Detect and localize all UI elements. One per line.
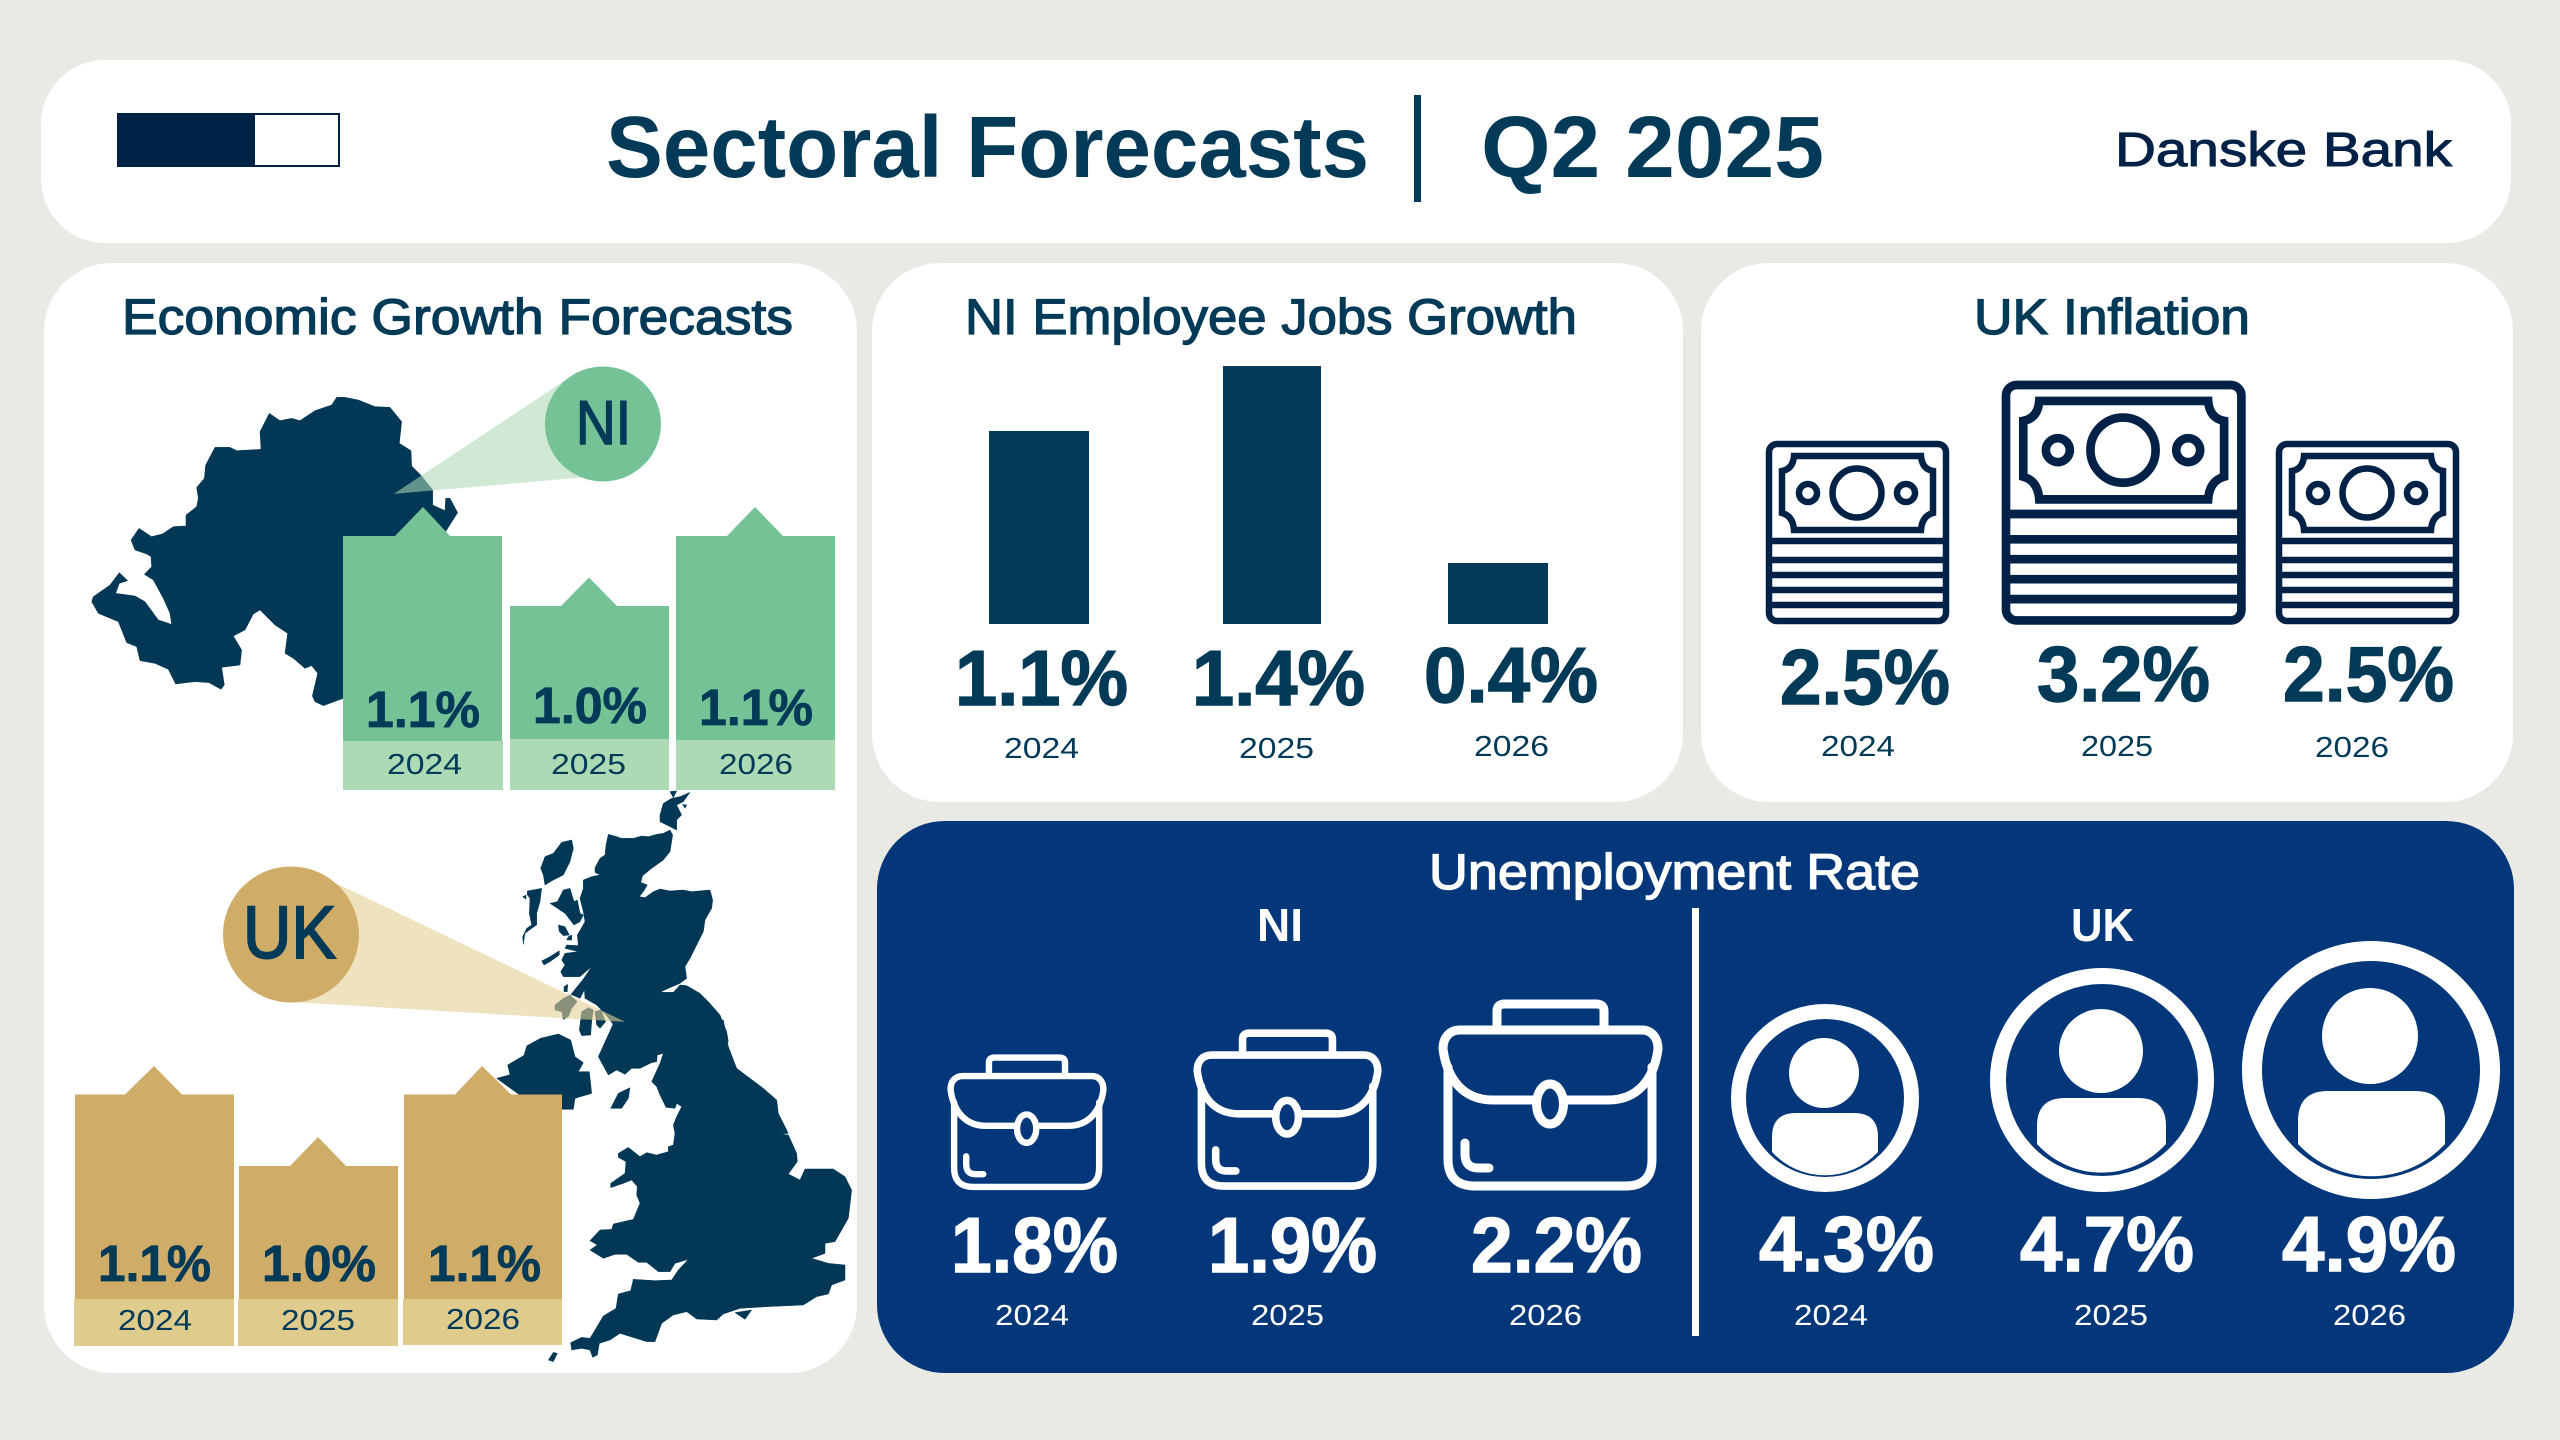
value: UK 2024: 4.3% [1759, 1200, 1934, 1288]
year: inflation 2026: 2026 [2315, 732, 2389, 764]
callout cone: UK [263, 883, 625, 1022]
value: NI 2026: 2.2% [1471, 1201, 1642, 1289]
brand name: Danske Bank [2115, 124, 2453, 177]
bar: UK 2026 [403, 1066, 562, 1345]
value: UK 2025: 4.7% [2020, 1200, 2194, 1288]
bar: NI 2024 [343, 507, 503, 790]
heading: unemployment rate: Unemployment Rate [1429, 844, 1920, 900]
bar: jobs 2025: 1.4% [1192, 634, 1365, 722]
callout cone: NI [394, 380, 631, 494]
value: inflation 2025: 3.2% [2037, 630, 2210, 718]
year: inflation 2025: 2025 [2081, 731, 2153, 763]
panel: economic growth forecasts [44, 263, 857, 1373]
bar: NI 2026 [676, 507, 835, 790]
callout circle: NI [545, 366, 661, 482]
icon: person UK 2025 [1998, 976, 2206, 1184]
value: NI 2024: 1.8% [951, 1201, 1118, 1289]
title separator [1414, 95, 1421, 202]
divider [1692, 908, 1699, 1336]
bar: NI 2026: 2026 [719, 749, 793, 781]
subheading: UK: UK [2071, 899, 2134, 951]
year: NI 2024: 2024 [995, 1300, 1069, 1332]
panel: UK inflation [1701, 263, 2513, 802]
callout circle: NI: NI [576, 389, 631, 458]
icon: briefcase NI 2026 [1443, 1004, 1658, 1186]
title period: Q2 2025 [1481, 99, 1824, 196]
year: NI 2026: 2026 [1509, 1300, 1582, 1332]
heading: UK inflation: UK Inflation [1974, 289, 2250, 345]
bar: jobs 2026: 0.4% [1424, 631, 1598, 719]
bar: jobs 2024: 1.1% [955, 634, 1128, 722]
bar: jobs 2024 [955, 431, 1128, 765]
heading: NI employee jobs growth: NI Employee Jobs Growth [965, 289, 1577, 345]
bar: UK 2026: 2026 [446, 1304, 520, 1336]
bar: UK 2024 [74, 1066, 234, 1346]
bar: UK 2024: 2024 [118, 1305, 192, 1337]
bar: jobs 2026: 2026 [1474, 731, 1549, 763]
value: inflation 2026: 2.5% [2283, 630, 2454, 718]
bar: NI 2025: 1.0% [533, 677, 647, 734]
callout circle: UK [223, 866, 359, 1002]
heading: economic growth forecasts: Economic Growth Forecasts [122, 289, 793, 345]
map: Northern Ireland [92, 397, 458, 706]
year: NI 2025: 2025 [1251, 1300, 1324, 1332]
bar: NI 2024: 2024 [387, 749, 462, 781]
bar: NI 2025: 2025 [551, 749, 626, 781]
logo: two-tone rectangle [118, 113, 339, 167]
icon: person UK 2026 [2252, 951, 2490, 1189]
icon: briefcase NI 2024 [951, 1058, 1103, 1187]
bar: NI 2024: 1.1% [366, 681, 480, 738]
bar: NI 2026: 1.1% [699, 679, 813, 736]
icon: briefcase NI 2025 [1197, 1033, 1378, 1186]
bar: jobs 2024: 2024 [1004, 733, 1079, 765]
icon: banknote stack 2024 [1769, 444, 1946, 621]
bar: UK 2025 [238, 1137, 398, 1346]
year: inflation 2024: 2024 [1821, 731, 1895, 763]
icon: person UK 2024 [1738, 1012, 1912, 1184]
bar: jobs 2025 [1192, 366, 1365, 765]
value: UK 2026: 4.9% [2282, 1200, 2456, 1288]
bar: jobs 2026 [1424, 563, 1598, 763]
value: inflation 2024: 2.5% [1780, 633, 1950, 721]
panel: NI employee jobs growth [872, 263, 1683, 802]
icon: banknote stack 2025 [2006, 385, 2241, 620]
callout circle: UK: UK [243, 891, 336, 974]
icon: banknote stack 2026 [2279, 444, 2456, 621]
bar: NI 2025 [510, 578, 669, 790]
year: UK 2025: 2025 [2074, 1300, 2148, 1332]
panel: unemployment rate [877, 821, 2514, 1373]
value: NI 2025: 1.9% [1208, 1201, 1377, 1289]
bar: UK 2024: 1.1% [98, 1235, 211, 1292]
title: Sectoral Forecasts [606, 99, 1369, 196]
year: UK 2026: 2026 [2333, 1300, 2406, 1332]
bar: jobs 2025: 2025 [1239, 733, 1314, 765]
bar: UK 2025: 2025 [281, 1305, 355, 1337]
panel: header [41, 60, 2511, 243]
bar: UK 2025: 1.0% [262, 1235, 376, 1292]
subheading: NI: NI [1257, 899, 1303, 951]
year: UK 2024: 2024 [1794, 1300, 1868, 1332]
bar: UK 2026: 1.1% [428, 1235, 541, 1292]
map: United Kingdom [497, 791, 852, 1362]
